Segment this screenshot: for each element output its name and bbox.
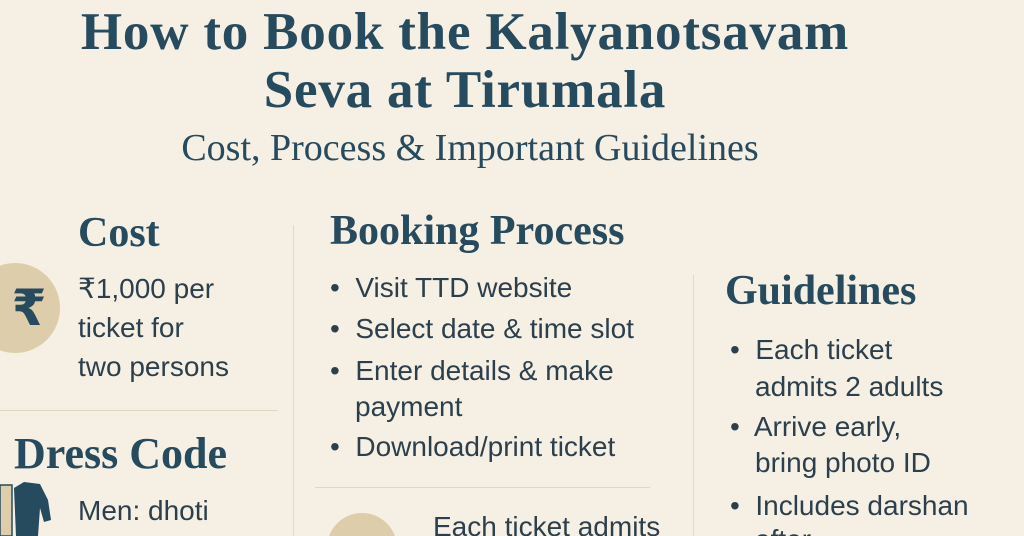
booking steps: • Select date & time slot (330, 313, 634, 344)
men dress text: Men: dhoti (78, 495, 209, 526)
booking steps: payment (355, 391, 462, 422)
title: How to Book the Kalyanotsavam (81, 3, 849, 61)
icon: rupee coin: ₹ (12, 279, 46, 337)
booking steps: • Enter details & make (330, 355, 614, 386)
subtitle: Cost, Process & Important Guidelines (181, 127, 759, 169)
booking steps: • Visit TTD website (330, 272, 572, 303)
booking heading: Booking Process (330, 208, 624, 254)
cost text: ₹1,000 per (78, 273, 214, 304)
icon: circle (329, 513, 395, 536)
guideline list: • Arrive early, (730, 411, 901, 442)
guideline list: • Includes darshan (730, 490, 969, 521)
guideline list: admits 2 adults (755, 371, 943, 402)
guidelines heading: Guidelines (725, 268, 916, 314)
title (81, 3, 849, 119)
booking steps: • Download/print ticket (330, 431, 615, 462)
guideline list: bring photo ID (755, 447, 931, 478)
cost text: ticket for (78, 312, 184, 343)
cost text (78, 273, 229, 382)
panel: cost (0, 210, 229, 382)
guideline list (730, 334, 969, 536)
panel: dress code (0, 430, 227, 536)
icon: garment (0, 482, 51, 536)
guideline list: • Each ticket (730, 334, 892, 365)
icon: rupee coin (0, 263, 60, 353)
panel: guidelines (725, 268, 969, 536)
cost heading: Cost (78, 210, 160, 256)
panel: booking process (315, 208, 660, 536)
title: Seva at Tirumala (264, 61, 666, 119)
cost text: two persons (78, 351, 229, 382)
booking steps (330, 272, 634, 462)
dress code heading: Dress Code (14, 430, 227, 478)
